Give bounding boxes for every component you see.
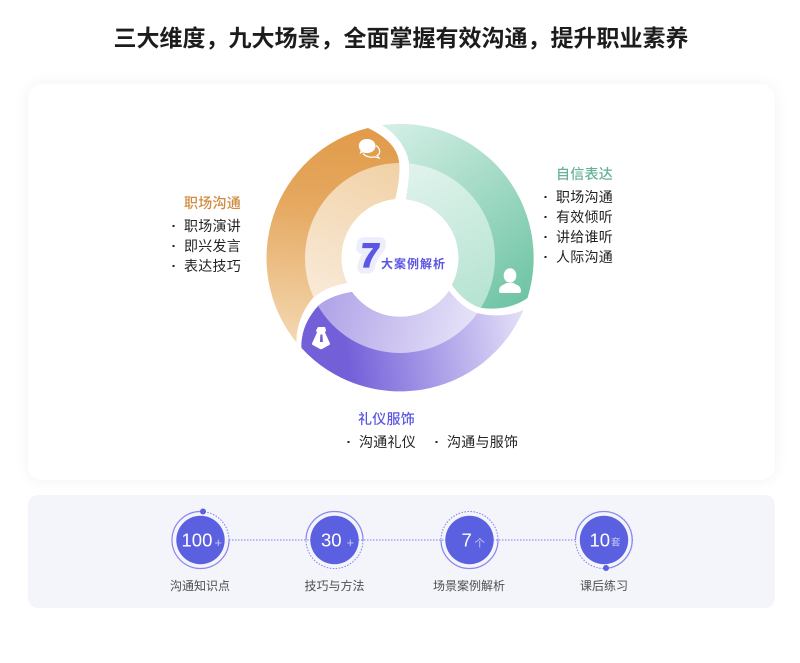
segment: purple <box>301 291 524 391</box>
stat badge: 30+ <box>306 512 363 568</box>
list: 礼仪服饰 topics: 沟通礼仪 <box>359 434 416 450</box>
icon: person <box>499 268 521 293</box>
stat badge: 100+: + <box>214 535 222 550</box>
list: 职场沟通 topics <box>172 218 241 274</box>
center number 7: 7 <box>358 237 382 275</box>
stat badge: 30+: + <box>346 535 354 550</box>
caption: 技巧与方法: 技巧与方法 <box>304 579 364 593</box>
list: 职场沟通 topics: 职场演讲 <box>184 218 241 234</box>
list: 自信表达 topics: 讲给谁听 <box>556 229 613 245</box>
ring chart <box>171 124 633 571</box>
heading: 自信表达: 自信表达 <box>556 166 613 182</box>
panel: stats band <box>28 495 775 608</box>
segment: green <box>382 124 534 309</box>
stat badge: 7 个: 个 <box>474 538 486 550</box>
panel: ring diagram card <box>28 84 775 480</box>
list: 自信表达 topics: 人际沟通 <box>556 249 613 265</box>
heading: 职场沟通: 职场沟通 <box>184 195 241 211</box>
stat badge: 100+: 100 <box>182 530 212 550</box>
stat badge: 100+ <box>172 508 229 568</box>
stat badge: 10 套 <box>576 512 632 571</box>
title: 三大维度，九大场景，全面掌握有效沟通，提升职业素养 <box>114 25 688 51</box>
list: 自信表达 topics: 有效倾听 <box>556 209 613 225</box>
center label: 大案例解析 <box>381 256 446 271</box>
list: 职场沟通 topics: 即兴发言 <box>184 238 241 254</box>
list item: 沟通与服饰: 沟通与服饰 <box>447 434 518 450</box>
stat badge: 30+: 30 <box>321 530 342 550</box>
caption: 沟通知识点: 沟通知识点 <box>170 579 230 593</box>
list: 自信表达 topics: 职场沟通 <box>556 189 613 205</box>
stat badge: 10 套: 套 <box>611 536 621 548</box>
segment: orange <box>266 128 399 342</box>
stat badge: 10 套: 10 <box>590 530 610 550</box>
heading: 礼仪服饰: 礼仪服饰 <box>358 411 415 427</box>
stats connector line <box>229 539 575 541</box>
stat badge: 7 个: 7 <box>462 530 472 550</box>
icon: necktie <box>312 327 330 349</box>
caption: 场景案例解析: 场景案例解析 <box>433 579 505 593</box>
list: 职场沟通 topics: 表达技巧 <box>184 258 241 274</box>
center number 7: 7 <box>358 237 382 275</box>
caption: 课后练习: 课后练习 <box>580 579 628 593</box>
icon: chat bubbles <box>359 139 380 158</box>
stat badge: 7 个 <box>441 512 498 568</box>
list: 自信表达 topics <box>544 189 613 265</box>
